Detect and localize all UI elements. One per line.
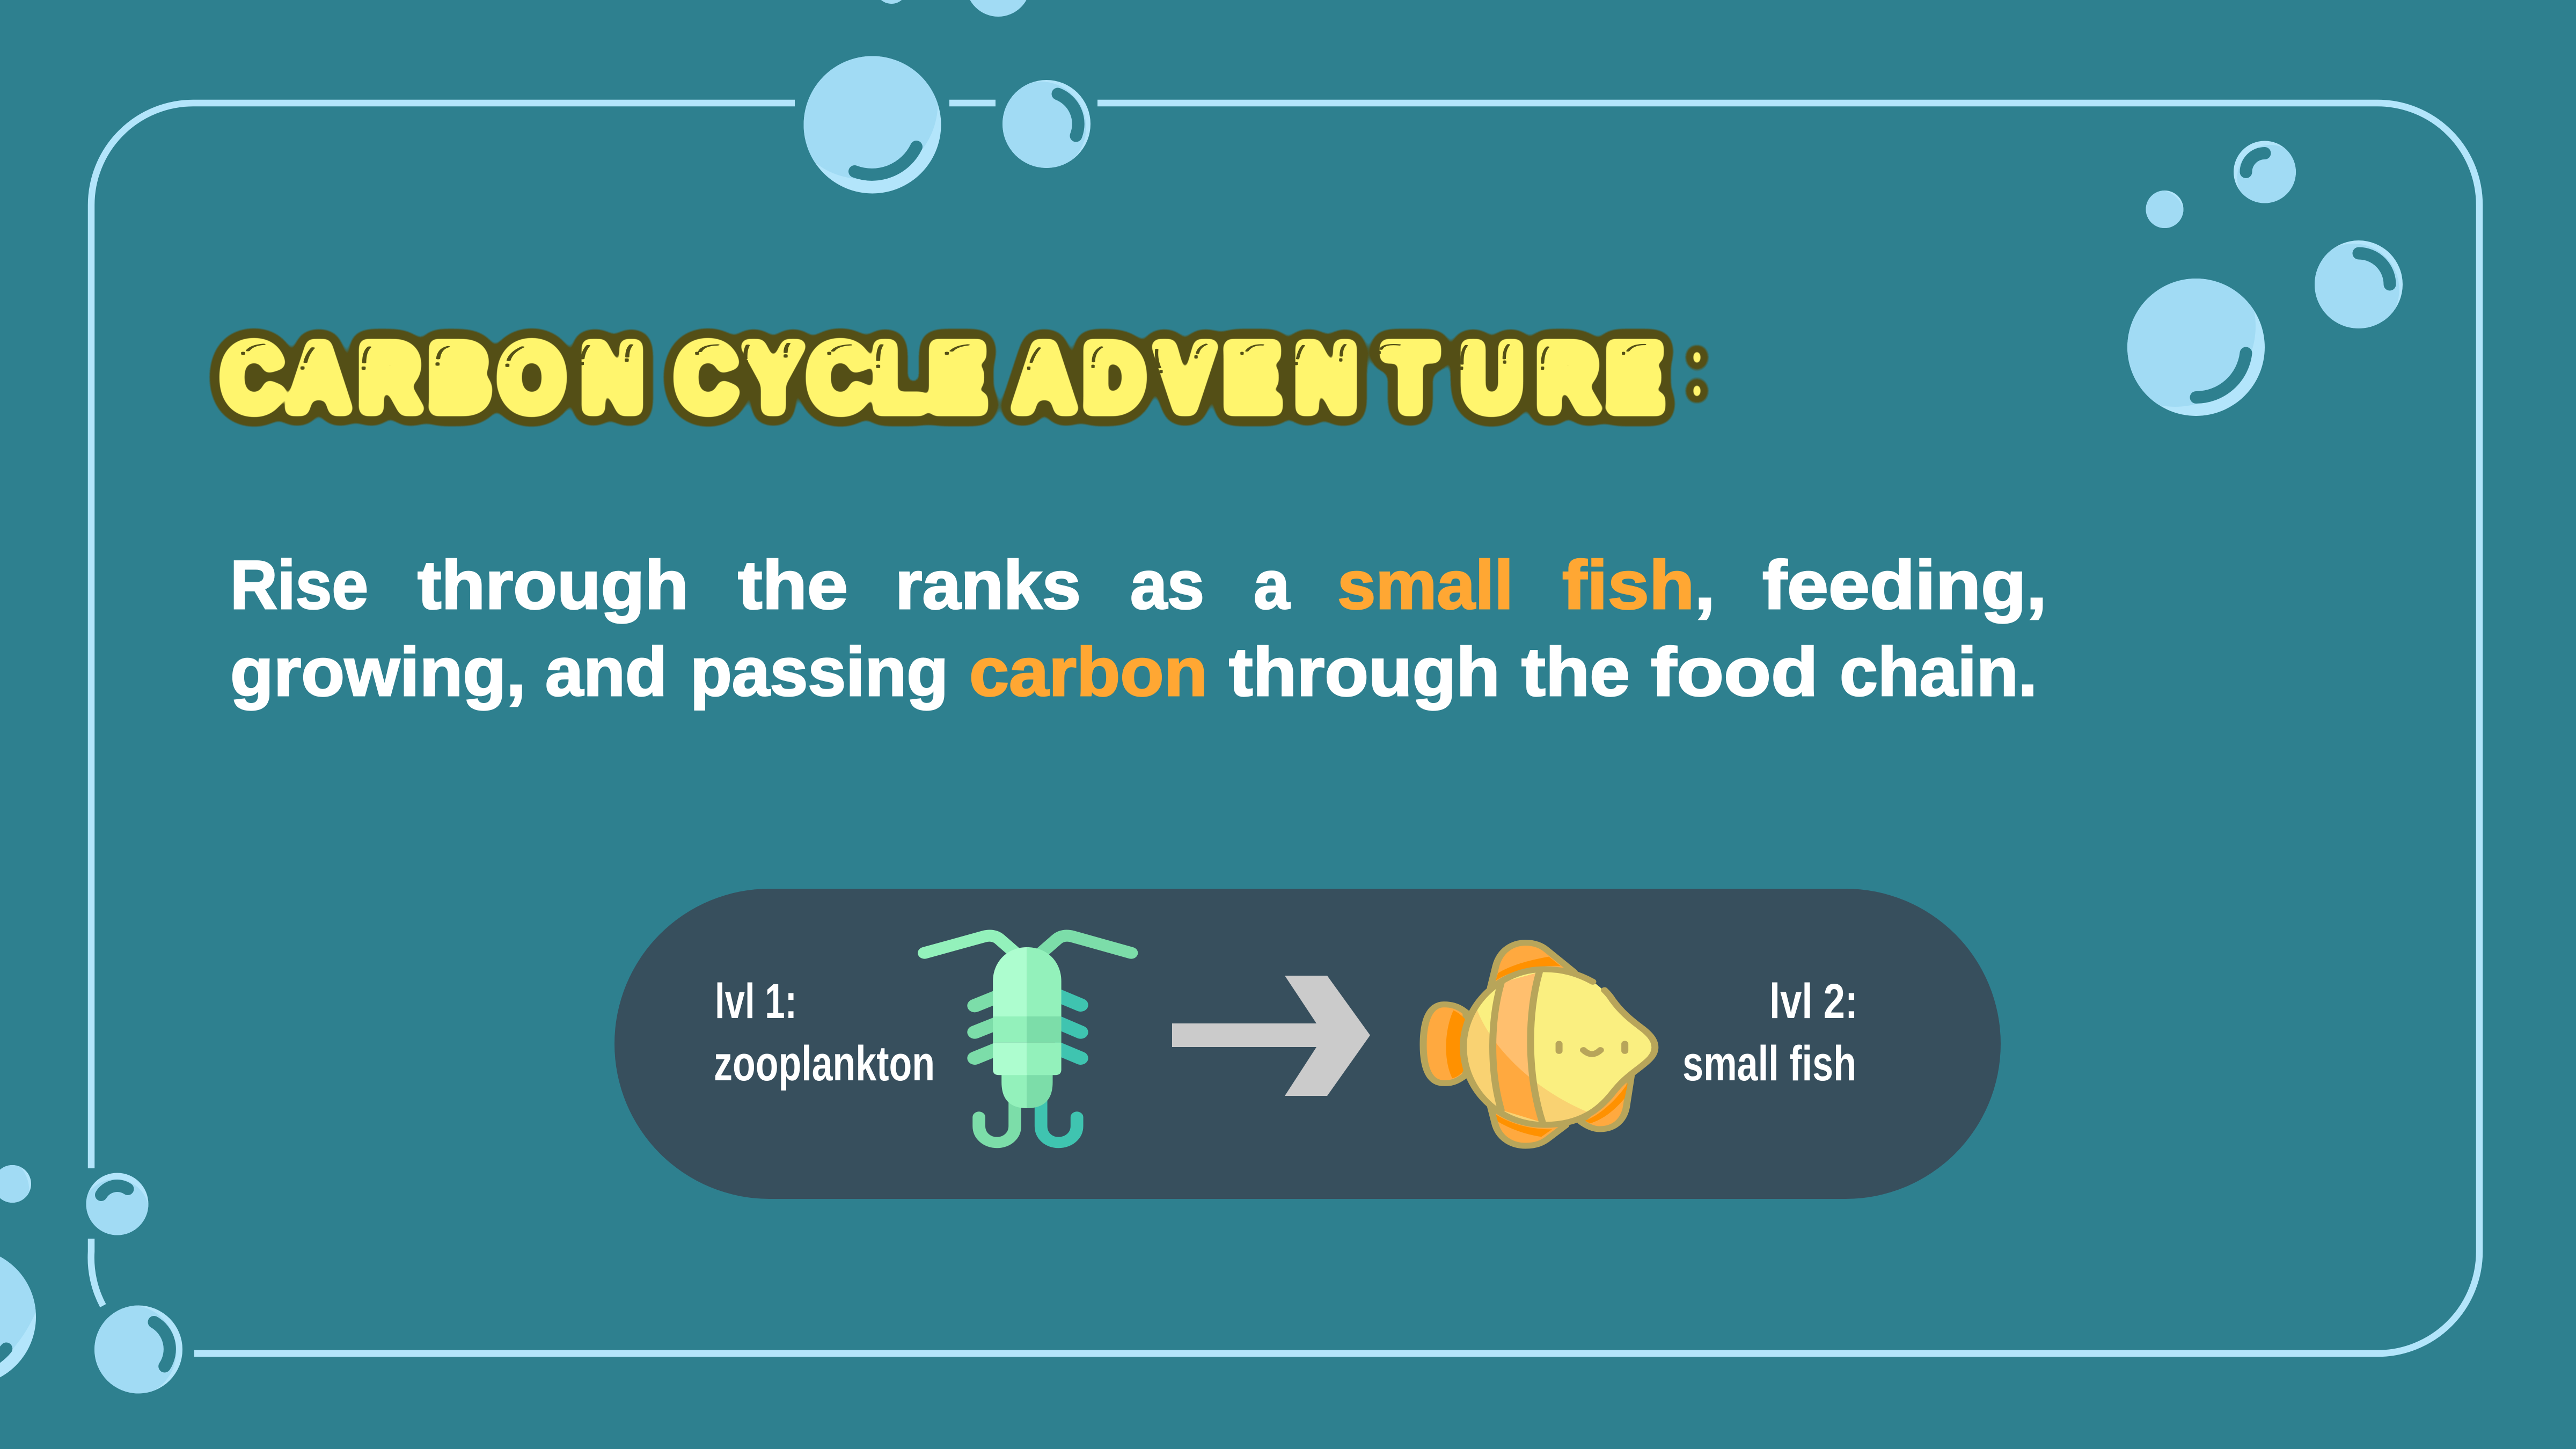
bubbles: bottom left <box>0 1165 182 1393</box>
body text: passing <box>690 634 948 711</box>
bubbles: top right <box>2127 141 2403 416</box>
body text: feeding, <box>1762 547 2047 624</box>
body text: as <box>1130 547 1204 624</box>
body text: a <box>1254 547 1290 624</box>
icon: small fish <box>1423 943 1655 1146</box>
body text: Rise <box>230 547 368 624</box>
body text: chain. <box>1840 634 2037 711</box>
body text: and <box>545 634 667 711</box>
label: lvl 2 small fish <box>1682 974 1858 1091</box>
title: CYCLE <box>677 327 985 429</box>
label: lvl 1 zooplankton: zooplankton <box>714 1036 935 1091</box>
label: lvl 2 small fish: small fish <box>1682 1036 1856 1091</box>
body text <box>230 547 2047 711</box>
title: : <box>1689 315 1705 417</box>
body text: the <box>738 547 848 624</box>
title <box>223 315 1705 429</box>
title: ADVENTURE <box>1015 327 1662 429</box>
label: lvl 1 zooplankton: lvl 1: <box>715 974 797 1029</box>
body text: small <box>1337 547 1513 624</box>
body text: carbon <box>969 634 1208 711</box>
icon: zooplankton <box>925 936 1131 1143</box>
food chain pill <box>614 889 2001 1199</box>
title: CARBON <box>223 327 642 429</box>
body text: growing, <box>230 634 526 711</box>
bubbles: top <box>787 0 1091 193</box>
body text: through <box>1229 634 1500 711</box>
body text: the <box>1521 634 1630 711</box>
body text: fish, <box>1562 547 1715 624</box>
arrow <box>1172 976 1370 1096</box>
label: lvl 1 zooplankton <box>714 974 935 1091</box>
body text: through <box>418 547 689 624</box>
label: lvl 2 small fish: lvl 2: <box>1769 974 1858 1029</box>
body text: ranks <box>895 547 1081 624</box>
body text: food <box>1651 634 1818 711</box>
